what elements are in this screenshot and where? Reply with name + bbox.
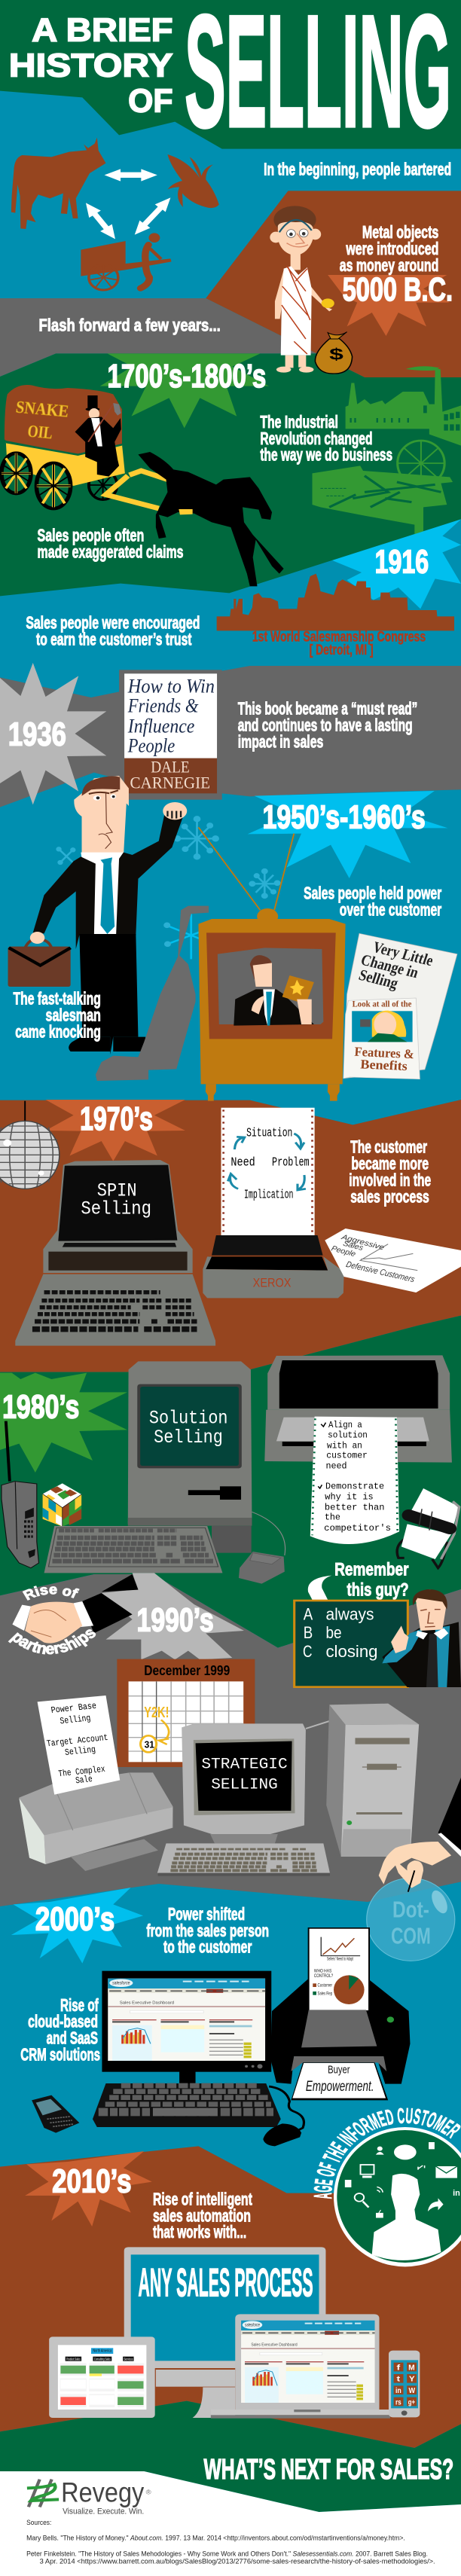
illustration: black printer with reports: Sales Rep [318, 1992, 332, 1996]
text: cloud-based CRM: CRM solutions [20, 2046, 100, 2065]
illustration: black keyboard and mouse [93, 2083, 304, 2146]
illustration: phone with social icons: W [409, 2387, 416, 2395]
starburst: 2000s [11, 1888, 143, 1964]
panel: 1700s background [0, 353, 461, 596]
title: A BRIEF [32, 12, 172, 48]
starburst: 5000 BC [328, 275, 450, 336]
illustration: inkjet printer with list: Power Base [50, 1701, 97, 1716]
text: power shifted: to the customer [163, 1938, 252, 1957]
heading: 1970s: 1970’s [80, 1100, 153, 1137]
illustration: inkjet printer with list: The Complex [58, 1764, 106, 1779]
text: cloud-based CRM: cloud-based [28, 2013, 98, 2031]
text: sources [26, 2520, 435, 2565]
book cover: How to Win [127, 676, 215, 697]
illustration: December 1999 calendar [117, 1659, 255, 1767]
text: exaggerated claims: Sales people often [38, 526, 144, 545]
illustration: inkjet printer with list [19, 1695, 172, 1871]
panel: flash forward band [0, 298, 316, 377]
text: remember this guy [334, 1559, 409, 1600]
arrow: cow to goat [105, 169, 157, 182]
illustration: phone with social icons [389, 2351, 420, 2417]
illustration: dot-matrix printer [264, 1355, 452, 1544]
heading: 1990s: 1990’s [136, 1601, 214, 1638]
illustration: black printer with reports: Empowerment. [306, 2078, 374, 2095]
illustration: tablet: Services [124, 2358, 133, 2361]
screen: salesforce dashboard: Sales Executive Dashboard [251, 2343, 298, 2348]
panel: title background [0, 0, 461, 149]
illustration: December 1999 calendar: 31 [145, 1739, 154, 1750]
logo: Revegy: Visualize. Execute. Win. [63, 2506, 144, 2516]
illustration: disco ball [0, 1101, 60, 1189]
screen: salesforce dashboard [241, 2321, 375, 2403]
illustration: phone with social icons: g+ [408, 2398, 415, 2407]
text: fast-talking salesman: salesman [45, 1006, 101, 1025]
illustration: Detroit skyline [217, 574, 454, 630]
book cover: People [127, 735, 175, 757]
illustration: newspaper [343, 933, 457, 1079]
text: exaggerated claims [38, 526, 184, 562]
illustration: dot-matrix printer: Align a [328, 1420, 362, 1430]
decorative snowflakes [57, 816, 279, 959]
illustration: black printer with reports [270, 1927, 410, 2100]
heading: 1980s: 1980’s [2, 1388, 79, 1425]
icon: goat [167, 154, 219, 208]
title [9, 0, 451, 160]
text: remember this guy: Remember [334, 1559, 409, 1579]
text: flash forward: Flash forward a few years... [39, 316, 221, 335]
arrow: to chalkboard [308, 1576, 331, 1604]
character: closer salesman [382, 1589, 461, 1687]
section: 1936 and 1950s [0, 663, 457, 1101]
illustration: inkjet printer with list: Selling [64, 1744, 96, 1758]
illustration: factory [346, 366, 461, 446]
illustration: black printer with reports: Buyer [328, 2065, 350, 2076]
illustration: newspaper: Change in [359, 951, 421, 981]
illustration: hand popping dot-com bubble: COM [391, 1924, 431, 1949]
character: salesman on wagon [75, 395, 121, 477]
illustration: handshake [8, 1574, 139, 1654]
icon: brick phone [2, 1421, 39, 1568]
illustration: newspaper: Very Little [371, 938, 435, 969]
illustration: newspaper: Selling [357, 966, 401, 992]
harness strap [179, 509, 193, 514]
illustration: dot-matrix printer: better than [325, 1502, 385, 1512]
section: 1990s desk [11, 1659, 461, 1964]
illustration: loom [313, 441, 453, 537]
antennas [198, 827, 294, 910]
illustration: dot-matrix printer: customer [326, 1451, 368, 1460]
panel: metal money background [206, 191, 461, 377]
text: remember this guy: this guy? [347, 1579, 409, 1600]
illustration: dot-matrix printer: the [325, 1512, 340, 1522]
title: HISTORY [9, 47, 173, 84]
illustration: CRT monitor [182, 1721, 329, 1843]
illustration: December 1999 calendar: December 1999 [144, 1663, 230, 1679]
starburst: 1970s [45, 1100, 185, 1161]
illustration: Macintosh computer: Selling [154, 1428, 223, 1448]
text: sales automation: sales automation [153, 2207, 251, 2226]
illustration: SPIN computer: Selling [81, 1199, 151, 1220]
illustration: desktop tower [326, 1704, 419, 1857]
illustration: CRT monitor: STRATEGIC [201, 1755, 288, 1773]
text: industrial revolution: Revolution changed [260, 430, 373, 449]
text: sources: Peter Finkelstein. "The History of Sales Mehodologies - Why Some Work and Others Don't." Salesessentials.com. 2007. Barrett Sales Blog. [26, 2550, 428, 2558]
illustration: black printer with reports: Customer [318, 1983, 333, 1988]
illustration: SPIN computer [15, 1160, 215, 1346]
panel: 1970s background [0, 1100, 461, 1372]
illustration: printer with SPIN paper: Need [230, 1156, 255, 1170]
illustration: laptop [211, 2314, 393, 2419]
illustration: report page: Sales [342, 1239, 365, 1253]
illustration: hand popping dot-com bubble [367, 1778, 461, 1961]
text: metal objects [340, 224, 453, 307]
section: barter [11, 138, 451, 290]
text: power shifted [146, 1906, 269, 1957]
illustration: report page [325, 1228, 461, 1293]
illustration: newspaper: Features & [354, 1045, 414, 1062]
book cover: CARNEGIE [130, 774, 210, 792]
icon: smartphone [32, 2095, 79, 2133]
screen: salesforce dashboard: Sales Executive Dashboard [120, 2001, 174, 2006]
section: 1970s [0, 1100, 461, 1346]
illustration: black printer with reports: CONTROL? [314, 1973, 333, 1979]
starburst: 1950s [248, 791, 447, 878]
arrow: goat to cart [135, 197, 170, 235]
illustration: printer with SPIN paper: Implication [244, 1189, 294, 1202]
text: sources: Mary Bells. "The History of Money." About.com. 1997. 13 Mar. 2014 <http://inventors.about.com/od/mstartinventions/a/money.htm>. [26, 2535, 405, 2542]
icon: cow [11, 138, 106, 229]
illustration: phone with social icons: in [395, 2387, 401, 2395]
illustration: tablet [49, 2336, 155, 2418]
starburst: 1980s [0, 1373, 127, 1473]
illustration: tablet: Consulting Sales [94, 2358, 111, 2361]
illustration: tablet: North America [93, 2349, 112, 2354]
illustration: dot-matrix printer: why it is [325, 1492, 374, 1502]
illustration: snake oil wagon [2, 385, 167, 508]
starburst: 1700s [100, 353, 269, 428]
panel: 2010s background [0, 2146, 461, 2448]
logo: Revegy: Revegy [61, 2478, 144, 2508]
text: rise of partnerships: partnerships [8, 1629, 96, 1654]
text: sales automation: Rise of intelligent [153, 2190, 252, 2209]
illustration: chalkboard: A [304, 1605, 313, 1624]
illustration: hand popping dot-com bubble: Dot- [392, 1897, 429, 1923]
illustration: inkjet printer with list: Target Account [46, 1732, 108, 1749]
heading: 1936: 1936 [8, 716, 66, 752]
illustration: desktop display [124, 2247, 325, 2418]
text: rise of partnerships [8, 1586, 96, 1654]
panel: footer background [0, 2471, 461, 2576]
illustration: inkjet printer with list: Sale [75, 1774, 93, 1786]
illustration: newspaper: Look at all of the [353, 1000, 412, 1009]
icon: man with cart [81, 233, 172, 290]
text: customer involved [349, 1138, 431, 1207]
text: sales automation [153, 2190, 252, 2242]
text: congress: [ Detroit, MI ] [310, 642, 374, 658]
text: must read: impact in sales [238, 733, 323, 752]
illustration: phone with social icons: rs [395, 2398, 401, 2407]
text: industrial revolution [260, 414, 392, 465]
book cover: Influence [127, 716, 194, 737]
text: fast-talking salesman [14, 990, 101, 1042]
illustration: keyboard [157, 1843, 330, 1876]
illustration: printer with SPIN paper: XEROX [253, 1276, 291, 1290]
book cover [119, 670, 222, 800]
text: fast-talking salesman: came knocking [15, 1023, 101, 1042]
heading: 2010s: 2010’s [52, 2162, 131, 2199]
illustration: printer with SPIN paper [203, 1108, 344, 1298]
illustration: dot-matrix printer: need [325, 1460, 347, 1471]
section: 1916 [26, 519, 461, 658]
text: industrial revolution: The Industrial [260, 414, 338, 432]
heading: 2000s: 2000’s [35, 1900, 114, 1937]
icon: Rubik's cube [43, 1483, 81, 1527]
text: power shifted: from the sales person [146, 1922, 269, 1941]
heading: 1700s-1800s: 1700’s-1800’s [107, 358, 266, 394]
character: Roman figure [270, 206, 334, 373]
illustration: snake oil wagon: OIL [26, 422, 53, 443]
illustration: chalkboard: closing [325, 1643, 378, 1662]
starburst: 2010s [25, 2151, 152, 2227]
illustration: phone with social icons: f [397, 2364, 401, 2372]
text: fast-talking salesman: The fast-talking [14, 990, 101, 1009]
text: earn trust: Sales people were encouraged [26, 614, 200, 633]
text: sales automation: that works with... [153, 2223, 246, 2242]
section: 2000s desk [20, 1927, 461, 2267]
section: 2010s devices [26, 2247, 453, 2565]
illustration: television [198, 908, 346, 1101]
illustration: chalkboard: B [304, 1624, 313, 1643]
logo: Revegy: ® [146, 2489, 151, 2496]
starburst: 1936 [0, 663, 106, 804]
text: earn trust [26, 614, 200, 649]
panel: 1936 band [0, 666, 461, 807]
illustration: dot-matrix printer: Demonstrate [325, 1482, 384, 1491]
illustration: December 1999 calendar: Y2K! [144, 1704, 169, 1721]
illustration: dot-matrix printer: with an [327, 1440, 362, 1451]
text: congress [252, 629, 426, 658]
illustration: dot-matrix printer: solution [328, 1430, 368, 1440]
character: fast-talking salesman [33, 776, 187, 1055]
text: cloud-based CRM: and SaaS [47, 2029, 98, 2048]
icon: rolodex [397, 1488, 459, 1568]
illustration: inkjet printer with list: Selling [60, 1713, 91, 1726]
illustration: chalkboard: C [303, 1643, 313, 1662]
screen: salesforce dashboard: salesforce [112, 1981, 130, 1986]
character: TV presenter [234, 955, 314, 1026]
starburst: 1916 [332, 519, 461, 609]
illustration: chalkboard: always [325, 1605, 374, 1624]
illustration: chalkboard: be [325, 1624, 342, 1643]
illustration: tablet: Product Sales [66, 2358, 81, 2361]
text: held power [304, 884, 441, 920]
text: power shifted: Power shifted [168, 1906, 245, 1924]
illustration: dot-matrix printer: competitor's [324, 1523, 391, 1534]
illustration: printer with SPIN paper: Situation [246, 1126, 292, 1140]
text: cloud-based CRM [20, 1997, 100, 2065]
illustration: report page: Aggressive [340, 1233, 386, 1252]
badge: age of the informed customer [313, 2107, 461, 2267]
illustration: Macintosh computer [44, 1361, 285, 1584]
icon: money bag [315, 332, 353, 374]
title: OF [128, 83, 172, 119]
illustration: phone with social icons: t [397, 2375, 401, 2383]
panel: what's next background [0, 2401, 461, 2512]
section: 1700s-1800s [2, 353, 461, 586]
illustration: snake oil wagon: SNAKE [15, 398, 70, 421]
illustration: newspaper: Benefits [360, 1058, 408, 1074]
illustration: desktop monitor with dashboard [102, 1971, 271, 2083]
illustration: phone with social icons: Y [409, 2375, 416, 2383]
illustration: phone with social icons: M [408, 2364, 415, 2372]
icon: money bag: $ [329, 345, 343, 363]
panel: 1980s background [0, 1316, 461, 1648]
book cover: Friends & [127, 696, 198, 717]
illustration: printer with SPIN paper: Problem [272, 1156, 310, 1170]
text: sources: Sources: [26, 2520, 51, 2527]
icon: briefcase [8, 932, 71, 987]
text: earn trust: to earn the customer’s trust [36, 630, 191, 649]
heading: 1916: 1916 [375, 543, 429, 580]
panel: 1990s background [0, 1574, 461, 1906]
logo: Revegy [27, 2478, 151, 2516]
screen: salesforce dashboard [108, 1979, 265, 2061]
icons: social and web [345, 2142, 460, 2217]
illustration: grey figure leg [96, 906, 209, 1081]
text: exaggerated claims: made exaggerated claims [38, 543, 184, 562]
starburst: 1990s [102, 1573, 244, 1659]
illustration: CRT monitor: SELLING [211, 1775, 278, 1793]
illustration: SPIN computer: SPIN [97, 1181, 136, 1202]
screen: salesforce dashboard: salesforce [245, 2324, 260, 2328]
section: 1980s [0, 1355, 461, 1688]
illustration: report page: Defensive Customers [345, 1259, 416, 1284]
text: cloud-based CRM: Rise of [60, 1997, 99, 2016]
arrow: cow to cart [86, 203, 115, 239]
illustration: report page: People [330, 1244, 357, 1259]
illustration: Macintosh computer: Solution [149, 1409, 227, 1430]
illustration: black printer with reports: WHO HAS [314, 1969, 332, 1973]
text: must read [238, 700, 417, 752]
illustration: chalkboard [295, 1601, 408, 1687]
book cover: DALE [151, 758, 190, 777]
illustration: horse [138, 452, 284, 586]
illustration: black printer with reports: Sellers' Need to Adapt [327, 1957, 353, 1961]
section: metal money [39, 206, 453, 374]
text: rise of partnerships: Rise of [23, 1586, 80, 1601]
